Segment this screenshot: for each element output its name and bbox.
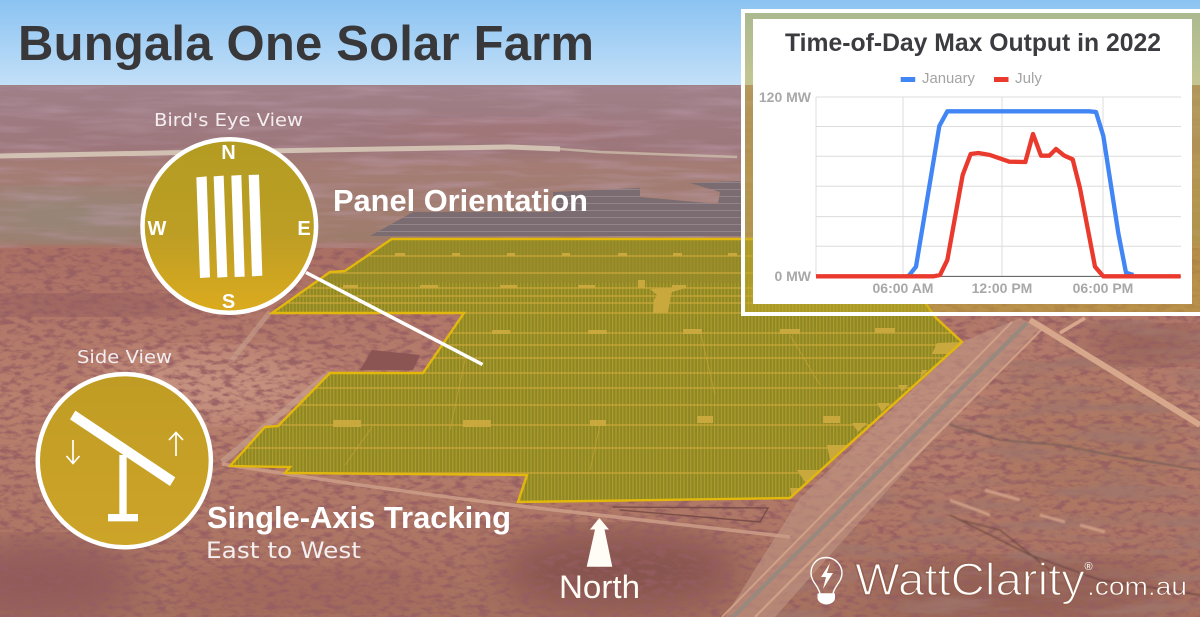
y axis labels: 120 MW xyxy=(759,89,812,105)
label: bird's eye view: Bird's Eye View xyxy=(154,110,303,131)
sub-heading: east to west: East to West xyxy=(206,539,361,564)
logo text: WattClarity xyxy=(855,554,1086,605)
north arrow xyxy=(587,518,612,567)
label: side view: Side View xyxy=(77,347,172,368)
x axis labels: 06:00 PM xyxy=(1073,280,1133,296)
legend: July xyxy=(1015,70,1042,87)
arrow up xyxy=(169,432,183,456)
grid xyxy=(816,97,1181,276)
x axis labels: 06:00 AM xyxy=(873,280,933,296)
dry river bed xyxy=(0,147,560,156)
y axis labels: 0 MW xyxy=(774,268,812,284)
arrow down xyxy=(66,440,80,464)
x axis labels: 12:00 PM xyxy=(972,280,1032,296)
compass letters: S xyxy=(222,291,235,313)
compass letters xyxy=(148,142,311,313)
panel rows xyxy=(196,175,262,278)
sky xyxy=(0,0,1200,86)
legend xyxy=(901,70,1042,87)
distant solar farm xyxy=(370,181,745,236)
series: July xyxy=(816,134,1181,276)
circle: panel orientation xyxy=(142,139,316,313)
dry river bed east xyxy=(560,149,737,157)
farm outline xyxy=(230,239,962,502)
heading: panel orientation: Panel Orientation xyxy=(333,183,588,218)
chart title: Time-of-Day Max Output in 2022 xyxy=(785,30,1161,57)
label: north: North xyxy=(559,569,640,605)
line chart xyxy=(759,89,1181,296)
heading: single-axis tracking: Single-Axis Tracking xyxy=(207,500,511,535)
compass letters: N xyxy=(221,142,236,164)
highlighted solar farm area xyxy=(225,235,970,507)
compass letters: W xyxy=(148,218,167,240)
x axis labels xyxy=(873,280,1133,296)
compass letters: E xyxy=(297,218,311,240)
logo domain: .com.au xyxy=(1087,573,1187,601)
legend: January xyxy=(922,70,975,87)
chart panel xyxy=(743,11,1200,314)
tracker panel xyxy=(70,411,175,521)
callout line xyxy=(306,272,482,364)
registered mark: ® xyxy=(1084,561,1093,573)
series: January xyxy=(908,111,1133,276)
title: Bungala One Solar Farm xyxy=(18,17,594,71)
logo: WattClarity xyxy=(811,554,1187,605)
y axis labels xyxy=(759,89,812,284)
roads xyxy=(222,240,1200,617)
circle: single-axis tracker side view xyxy=(38,374,211,547)
icon: light bulb xyxy=(811,558,842,604)
